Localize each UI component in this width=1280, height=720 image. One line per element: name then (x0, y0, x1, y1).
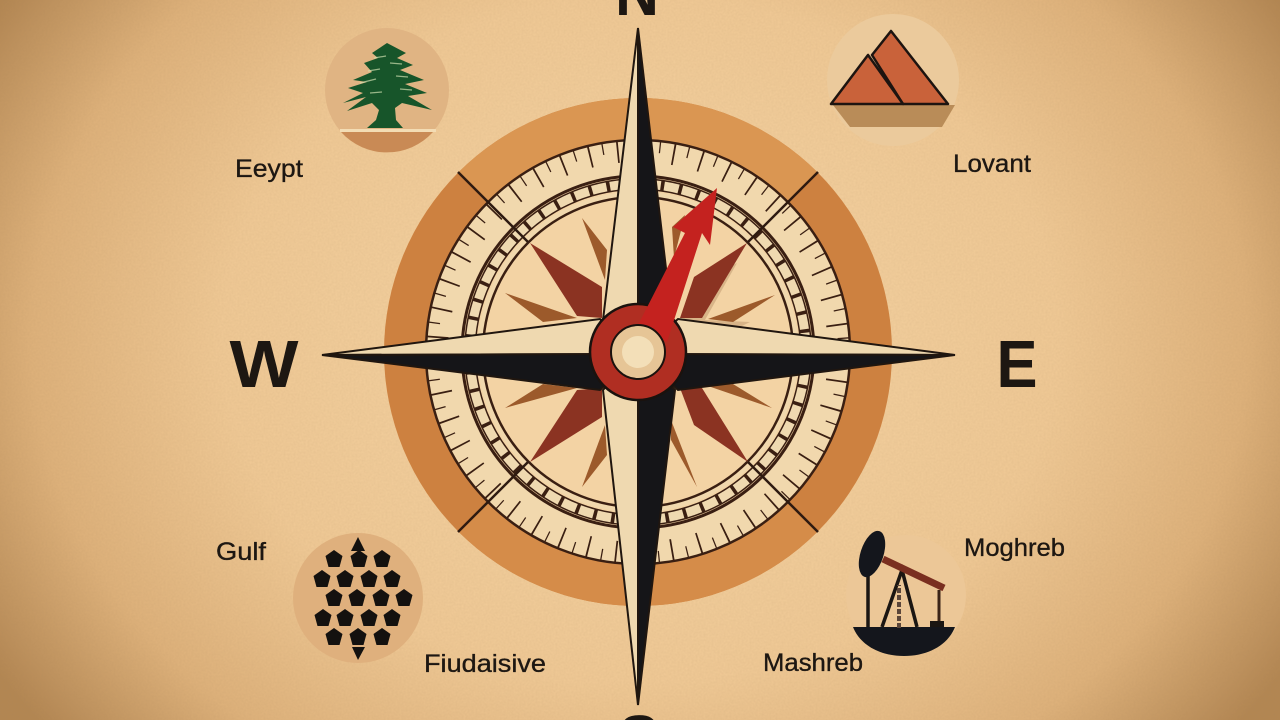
compass dial (384, 98, 892, 606)
red needle (637, 188, 717, 342)
label: Lovant: Lovant (953, 150, 1031, 178)
hub cap (611, 325, 665, 379)
orange outer ring (384, 98, 892, 606)
label: Gulf: Gulf (216, 538, 266, 566)
degree tick scale (426, 140, 850, 564)
cardinal letter W: W (230, 327, 299, 402)
label: Moghreb: Moghreb (964, 534, 1065, 562)
compass star: north-south arm (603, 28, 675, 705)
inner rose points (505, 215, 775, 487)
label: Eeypt: Eeypt (235, 155, 303, 183)
chain band (462, 176, 814, 528)
icon: geometric pattern medallion (293, 533, 423, 663)
label: Mashreb: Mashreb (763, 649, 863, 677)
compass star: east-west arm (322, 319, 955, 390)
label: Fiudaisive: Fiudaisive (424, 650, 546, 678)
diagonal dividers (458, 172, 818, 532)
cardinal letter E: E (996, 327, 1038, 402)
centre hub red ring (590, 304, 686, 400)
long rust points (530, 243, 748, 462)
needle cast shadow (672, 263, 750, 352)
icon: oil pump jack (846, 528, 966, 656)
thin brown points (505, 215, 775, 487)
icon: pyramids (827, 14, 959, 146)
icon: cedar tree (325, 28, 449, 152)
